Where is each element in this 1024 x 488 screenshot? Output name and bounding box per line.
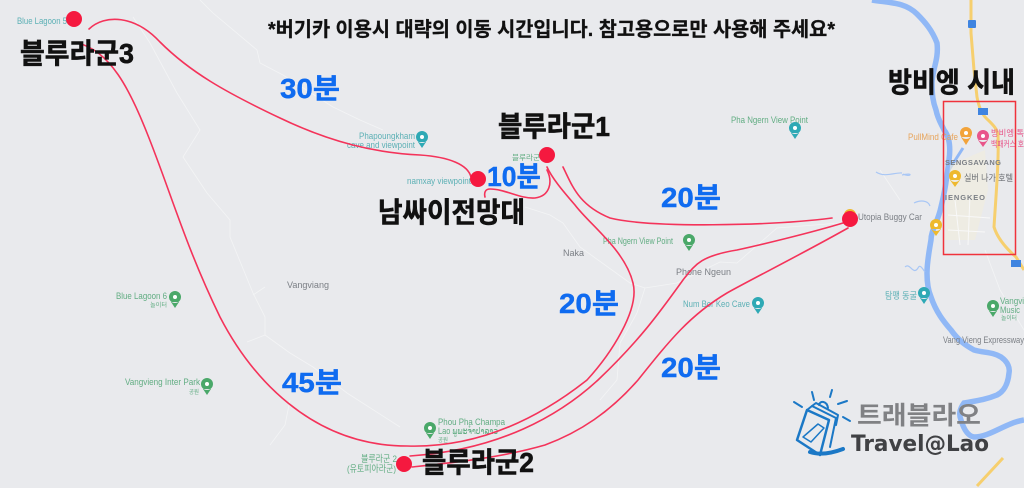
label: namxay viewpoint: 남싸이전망대 xyxy=(378,197,525,228)
map: Nam Song river xyxy=(872,0,1024,437)
map: town street grid xyxy=(948,195,990,245)
route: lagoon 1 to utopia xyxy=(563,167,832,225)
map: place labels: 실버 나가 호텔 xyxy=(964,172,1013,183)
map: place labels: 공원 xyxy=(438,436,448,444)
icon: blue suitcase xyxy=(794,390,850,455)
map: place labels: Blue Lagoon 6 xyxy=(116,291,167,302)
time: 20 minutes utopia to lagoon 2: 20분 xyxy=(661,352,721,383)
town boundary box xyxy=(944,102,1016,254)
map: highway road xyxy=(971,0,1024,486)
time: 20 minutes to utopia: 20분 xyxy=(661,182,721,213)
label: blue lagoon 3: 블루라군3 xyxy=(20,38,134,69)
map: place labels: Phou Pha Champa xyxy=(438,417,506,428)
time: 20 minutes to lagoon 2: 20분 xyxy=(559,288,619,319)
map: place labels: Utopia Buggy Car xyxy=(858,212,922,223)
map: place labels: 탐팽 동굴 xyxy=(885,290,917,302)
map: place labels: 방비엥 톡 xyxy=(991,128,1024,138)
logo text: Korean: 트래블라오 xyxy=(857,402,981,430)
logo: Travel@Lao xyxy=(794,390,989,457)
map: place labels: Num Bor Keo Cave xyxy=(683,299,750,310)
map: pin icons xyxy=(169,122,999,439)
map: place labels: 블루라군 2 xyxy=(361,454,397,465)
map: place labels: 놀이터 xyxy=(1001,314,1017,322)
map: place labels: Vangviang xyxy=(287,280,329,291)
label: blue lagoon 1: 블루라군1 xyxy=(498,111,610,142)
route: utopia to lagoon 2 upper xyxy=(410,223,843,456)
map: place labels: (유토피아라군) xyxy=(347,464,396,475)
map: place labels: Blue Lagoon 5 xyxy=(17,16,67,27)
route: lagoon 3 to namxay viewpoint xyxy=(89,19,471,177)
map: highway shields xyxy=(968,20,1021,267)
location markers xyxy=(66,11,858,472)
map: place labels: Lao ພູພະຈຳປາລາວ xyxy=(438,426,498,438)
map: place labels: Naka xyxy=(563,248,585,259)
map: place labels: PullMind Cafe xyxy=(908,132,958,143)
map: place labels: 공원 xyxy=(189,388,199,396)
route: lagoon 1 to namxay xyxy=(485,170,550,198)
map: place labels: Pha Ngern View Point xyxy=(731,115,808,126)
map: place labels: SENGSAVANG xyxy=(945,158,1001,167)
map: place labels: namxay viewpoint xyxy=(407,176,471,187)
map: place labels: Phone Ngeun xyxy=(676,267,731,278)
map: place labels: Vangvieng Inter Park xyxy=(125,377,200,388)
label: blue lagoon 2: 블루라군2 xyxy=(422,447,534,478)
time: 10 minutes: 10분 xyxy=(487,161,541,192)
map: place labels: Phapoungkham xyxy=(359,131,415,142)
label: vang vieng town: 방비엥 시내 xyxy=(888,67,1015,98)
map: place labels: Pha Ngern View Point xyxy=(603,236,673,247)
logo text: English: Travel@Lao xyxy=(851,432,989,457)
map: place labels: 블루라군 xyxy=(512,153,540,162)
map: town area xyxy=(945,150,988,240)
time: 30 minutes: 30분 xyxy=(280,73,340,104)
map: place labels: IENGKEO xyxy=(945,193,985,202)
route: lagoon 3 to lagoon 2 xyxy=(77,43,634,446)
map: place labels: 놀이터 xyxy=(150,301,167,309)
title: *버기카 이용시 대략의 이동 시간입니다. 참고용으로만 사용해 주세요* xyxy=(268,18,835,41)
time: 45 minutes: 45분 xyxy=(282,367,342,398)
map: place labels: cave and viewpoint xyxy=(347,140,415,151)
route: utopia to lagoon 2 lower xyxy=(412,228,848,467)
